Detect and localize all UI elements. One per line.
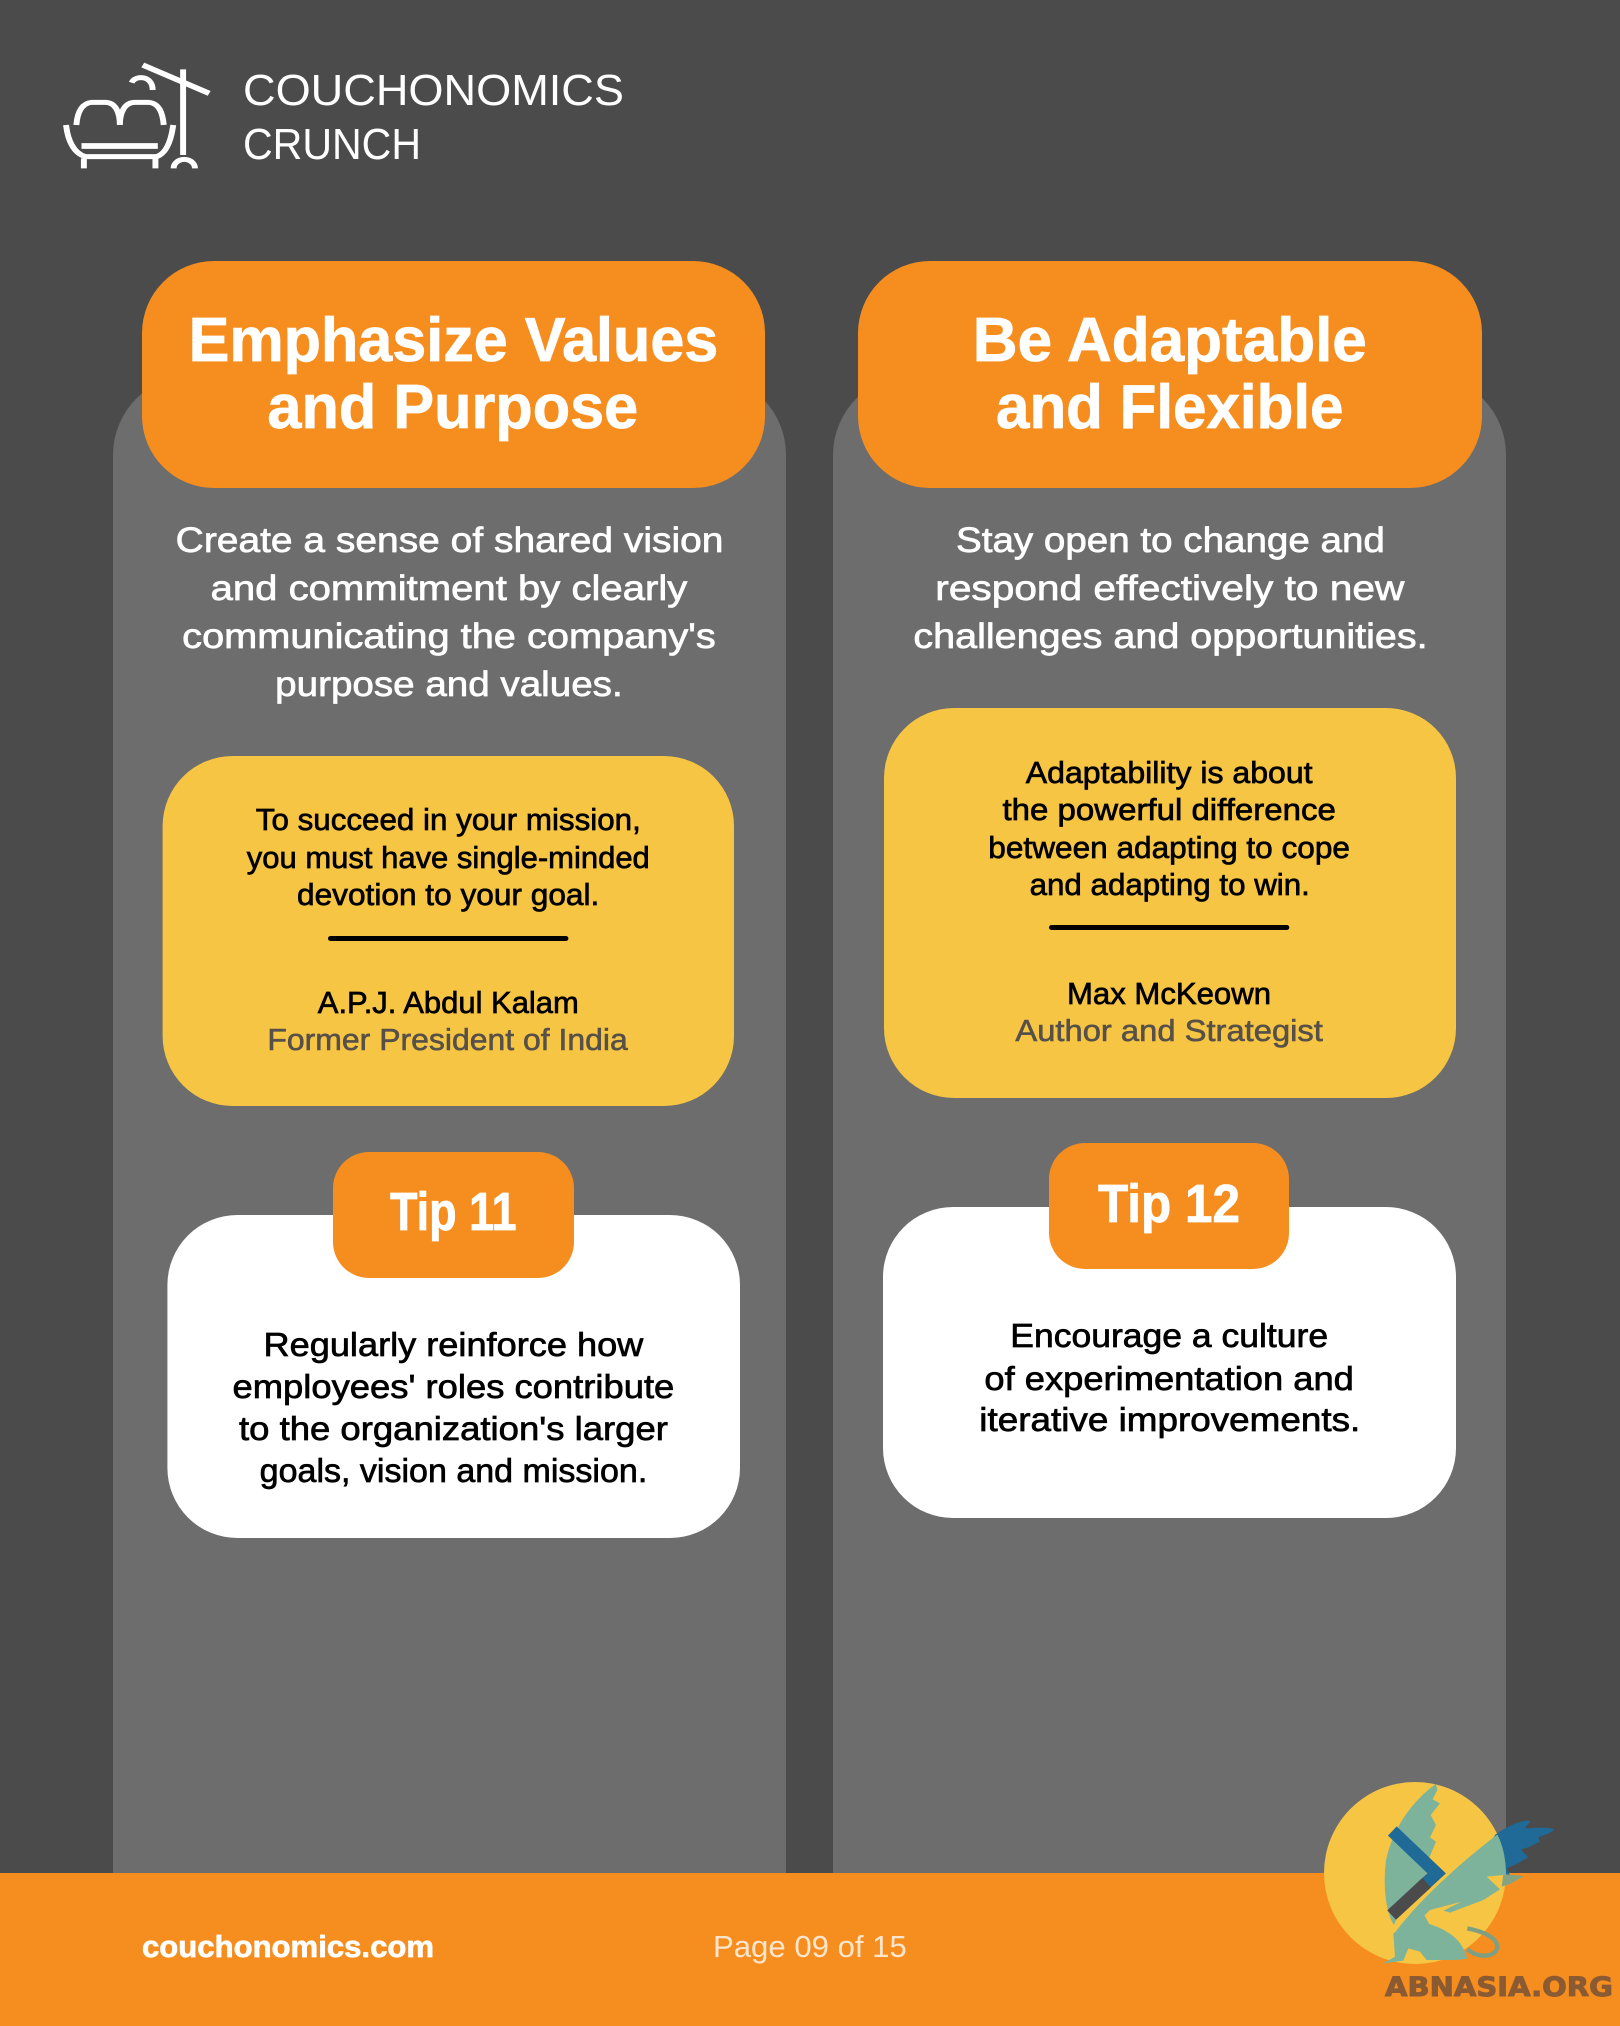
callout: quote by A.P.J. Abdul Kalam: Former President of India [267,1022,629,1057]
text block: right description: Stay open to change and [956,521,1385,560]
tip card: Tip 11: goals, vision and mission. [260,1452,647,1489]
chevron [1392,1831,1437,1915]
heading: Emphasize Values and Purpose: and Purpose [267,373,638,442]
text block: right description: challenges and opportunities. [913,617,1428,656]
footer page number: Page 09 of 15 [713,1929,907,1964]
tip card: Tip 11: employees' roles contribute [232,1368,674,1405]
callout: quote by A.P.J. Abdul Kalam [163,756,734,1106]
panel: left column [113,261,786,2015]
callout: quote by A.P.J. Abdul Kalam: To succeed in your mission, [256,802,641,837]
tip card: Tip 11 [167,1152,740,1538]
callout: quote by Max McKeown: Author and Strategist [1015,1013,1323,1048]
panel background [833,375,1506,2015]
icon: couch and floor lamp [66,65,209,168]
griffin body [1383,1913,1467,1963]
tip card: Tip 12: Tip 12 [1098,1174,1240,1234]
callout: quote by A.P.J. Abdul Kalam: A.P.J. Abdul Kalam [318,985,579,1020]
heading: Emphasize Values and Purpose [142,261,765,488]
text block: right description: respond effectively to new [935,569,1405,608]
callout: quote by Max McKeown: Adaptability is about [1026,755,1313,790]
panel background [113,375,786,2015]
text block: left description: purpose and values. [275,665,623,704]
callout: quote by Max McKeown: and adapting to win. [1030,867,1310,902]
callout: quote by Max McKeown [884,708,1456,1098]
tip card: Tip 11: Regularly reinforce how [264,1326,643,1363]
tip card: Tip 12: iterative improvements. [979,1401,1360,1438]
heading: Emphasize Values and Purpose: Emphasize Values [189,306,718,375]
icon: griffin watermark with sun [1324,1782,1613,2003]
callout: quote by A.P.J. Abdul Kalam: devotion to your goal. [297,877,599,912]
brand name [243,66,624,169]
heading: Be Adaptable and Flexible: and Flexible [996,373,1344,442]
text block: left description: and commitment by clearly [211,569,688,608]
panel: right column [833,261,1506,2015]
upper wing [1385,1784,1440,1925]
heading: Be Adaptable and Flexible [858,261,1482,488]
watermark text: ABNASIA.ORG [1385,1972,1613,2003]
text block: right description [913,521,1428,656]
tip card: Tip 12: Encourage a culture [1010,1317,1328,1354]
callout: quote by A.P.J. Abdul Kalam: you must have single-minded [247,840,650,875]
griffin tail [1467,1928,1497,1956]
callout: quote by Max McKeown: the powerful difference [1002,792,1336,827]
lower wing [1395,1834,1506,1932]
grey-teal feather over the orange band [1502,1874,1524,1887]
tip card: Tip 12: of experimentation and [984,1360,1354,1397]
tip card: Tip 12 [883,1143,1456,1518]
heading: Be Adaptable and Flexible: Be Adaptable [973,306,1367,375]
tip card: Tip 11: to the organization's larger [239,1410,668,1447]
text block: left description: communicating the company's [182,617,716,656]
text block: left description [176,521,723,704]
footer website: couchonomics.com [142,1929,434,1964]
logo: Couchonomics Crunch [66,65,624,169]
tip card: Tip 11: Tip 11 [390,1182,517,1242]
callout: quote by Max McKeown: Max McKeown [1067,976,1271,1011]
callout: quote by Max McKeown: between adapting to cope [988,830,1350,865]
blue wing tips outside the sun [1483,1821,1554,1875]
footer bar [0,1873,1620,2026]
brand name: COUCHONOMICS [243,66,624,115]
text block: left description: Create a sense of shared vision [176,521,723,560]
brand name: CRUNCH [243,120,421,169]
